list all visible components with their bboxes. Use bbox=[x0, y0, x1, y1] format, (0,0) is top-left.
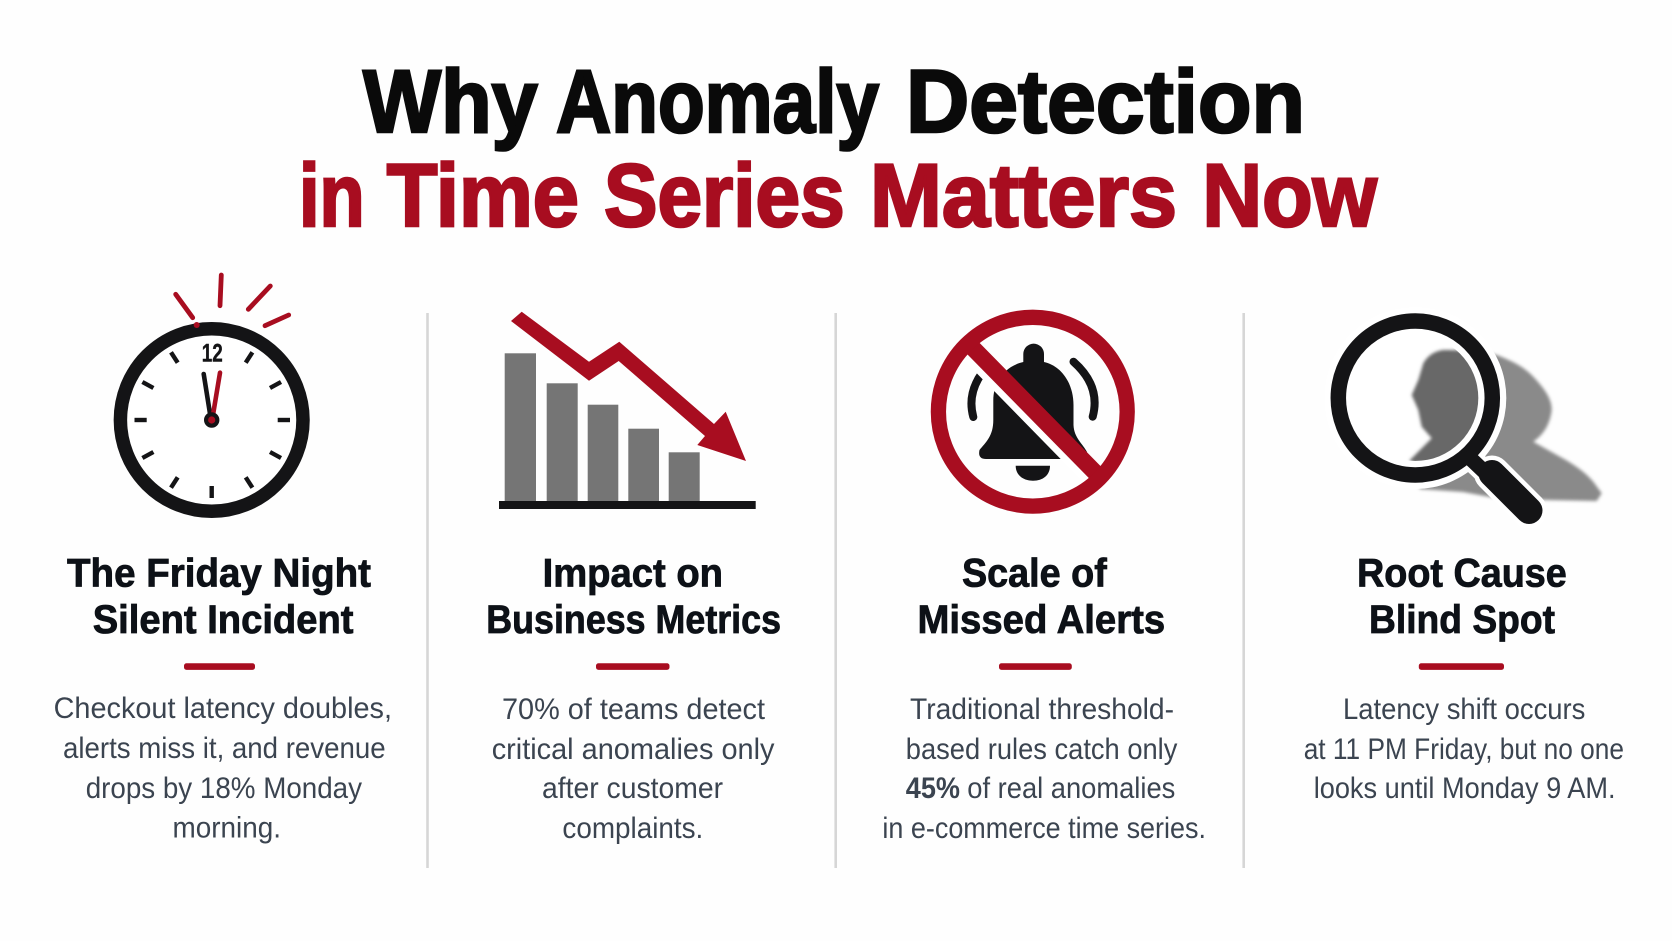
handle halo bbox=[1470, 458, 1529, 510]
heading bbox=[486, 552, 781, 642]
body text: morning. bbox=[172, 812, 281, 845]
icon: magnifier over shadow figure bbox=[1324, 307, 1602, 510]
lens ring bbox=[1338, 321, 1492, 475]
body text: looks until Monday 9 AM. bbox=[1314, 772, 1616, 805]
title line 2: in bbox=[299, 145, 365, 245]
ray contact dot bbox=[194, 322, 200, 328]
panel: missed alerts bbox=[882, 317, 1206, 845]
body text: Latency shift occurs bbox=[1343, 693, 1585, 726]
body text: in e-commerce time series. bbox=[882, 812, 1206, 845]
accent bar bbox=[1419, 663, 1504, 670]
heading: Impact on bbox=[543, 552, 723, 596]
body text: complaints. bbox=[562, 812, 703, 845]
alarm rays bbox=[176, 275, 289, 326]
body text: alerts miss it, and revenue bbox=[63, 732, 386, 765]
white gap beside slash bbox=[954, 340, 1103, 491]
red down arrow bbox=[511, 312, 746, 461]
icon: muted bell in prohibition sign bbox=[938, 317, 1127, 506]
silhouette seen through lens bbox=[1408, 348, 1478, 461]
title line 1: Why bbox=[363, 51, 538, 151]
clock hub bbox=[204, 412, 219, 428]
body text bbox=[54, 692, 392, 845]
panel: root cause blind spot bbox=[1304, 307, 1624, 805]
panel: business metrics bbox=[486, 312, 781, 845]
divider 1 bbox=[426, 313, 429, 868]
icon: declining bar chart bbox=[499, 312, 756, 509]
body text: 70% of teams detect bbox=[502, 693, 766, 726]
body text: 45% bbox=[906, 772, 960, 805]
body text: based rules catch only bbox=[906, 733, 1177, 766]
divider 3 bbox=[1242, 313, 1245, 868]
heading: Missed Alerts bbox=[918, 598, 1165, 642]
title line 2: Matters bbox=[870, 145, 1177, 245]
handle bbox=[1470, 458, 1529, 510]
title line 1: Detection bbox=[906, 51, 1305, 151]
body text bbox=[1304, 693, 1624, 805]
title line 2: Now bbox=[1202, 145, 1378, 245]
title bbox=[299, 51, 1378, 245]
title line 2 bbox=[299, 145, 1378, 245]
title line 2: Time bbox=[387, 145, 579, 245]
body text: drops by 18% Monday bbox=[86, 772, 362, 805]
panel: Friday night incident bbox=[54, 275, 392, 845]
heading: Scale of bbox=[962, 552, 1107, 596]
bell clapper bbox=[1016, 466, 1050, 481]
title line 1: Anomaly bbox=[556, 51, 879, 151]
accent bar bbox=[184, 663, 255, 670]
body text bbox=[882, 693, 1206, 845]
baseline bbox=[499, 501, 756, 509]
heading bbox=[1357, 552, 1567, 642]
title line 2: Series bbox=[604, 145, 845, 245]
heading: The Friday Night bbox=[67, 552, 371, 596]
prohibition ring bbox=[938, 317, 1127, 506]
prohibition slash bbox=[965, 340, 1103, 480]
heading: Blind Spot bbox=[1369, 598, 1555, 642]
body text: at 11 PM Friday, but no one bbox=[1304, 733, 1624, 766]
accent bar bbox=[999, 663, 1072, 670]
shadow silhouette bbox=[1410, 350, 1602, 501]
bell body bbox=[979, 344, 1087, 459]
heading bbox=[918, 552, 1165, 642]
body text: Traditional threshold- bbox=[910, 693, 1174, 726]
body text: after customer bbox=[542, 772, 723, 805]
heading: Business Metrics bbox=[486, 598, 781, 642]
heading bbox=[67, 552, 371, 642]
bars bbox=[505, 353, 700, 501]
icon: ringing clock bbox=[120, 275, 303, 511]
divider 2 bbox=[834, 313, 837, 868]
clock face bbox=[120, 329, 303, 511]
hour ticks bbox=[134, 352, 290, 498]
heading: Silent Incident bbox=[93, 598, 353, 642]
title line 1 bbox=[363, 51, 1305, 151]
clock hands bbox=[204, 373, 220, 418]
body text bbox=[492, 693, 774, 845]
numeral 12: 12 bbox=[202, 340, 223, 368]
sound waves bbox=[971, 362, 1095, 417]
lens halo bbox=[1324, 307, 1506, 489]
heading: Root Cause bbox=[1357, 552, 1567, 596]
body text: Checkout latency doubles, bbox=[54, 692, 392, 725]
accent bar bbox=[596, 663, 670, 670]
body text: of real anomalies bbox=[967, 772, 1175, 805]
body text: critical anomalies only bbox=[492, 733, 774, 766]
